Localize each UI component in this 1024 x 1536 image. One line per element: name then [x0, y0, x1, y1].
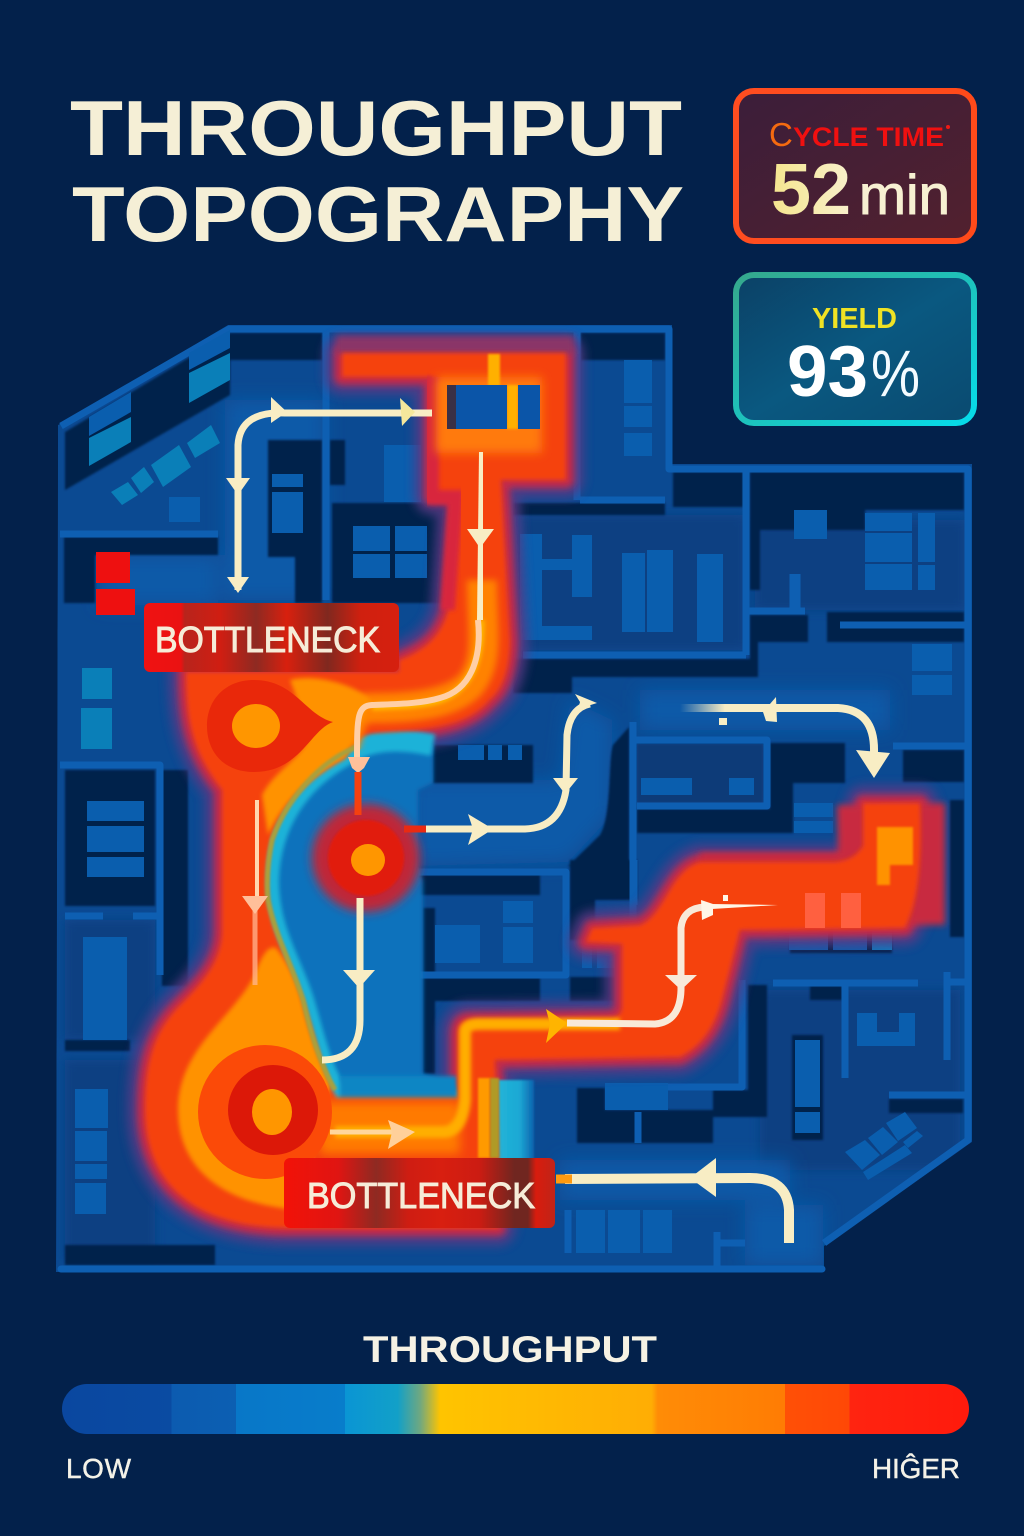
heat zone outer purple halo: [145, 353, 921, 1228]
heat: route glow: [345, 580, 484, 745]
KPI card: cycle time: [736, 91, 974, 241]
equipment blocks: [75, 330, 952, 1253]
heat: left red fringe: [432, 377, 456, 610]
lighter blue rooms: [637, 744, 763, 803]
label: bottleneck upper: [144, 603, 399, 672]
teal blocks: [81, 353, 230, 749]
KPI card: cycle time: 52: [771, 150, 851, 230]
heat: right zone fringe: [700, 803, 945, 925]
heat: top halo block: [336, 336, 574, 354]
KPI card: cycle time: C: [769, 116, 793, 153]
title: [70, 84, 684, 258]
legend low: LOW: [66, 1453, 132, 1484]
arrow: upper right: [680, 697, 890, 778]
heat: right zone orange and pink blocks: [805, 827, 913, 928]
legend: [62, 1329, 969, 1484]
lit corridor zones: [100, 400, 890, 1265]
arrow: down from top station: [348, 452, 494, 815]
arrow: lower corridor: [330, 895, 778, 1149]
heat: edge blend: [267, 746, 360, 1090]
heat zone fill: [145, 353, 921, 1228]
arrow: left channel down: [242, 800, 268, 985]
title: TOPOGRAPHY: [72, 170, 684, 258]
heat: amber lobe lower: [178, 947, 330, 1210]
walls: [60, 329, 968, 1269]
arrow: bottom right: [556, 1158, 789, 1243]
heat: amber lobe upper: [262, 678, 372, 835]
heat: bottom corridor: [320, 1102, 460, 1154]
heat: yellow accents: [488, 354, 518, 429]
dark rooms: [64, 333, 964, 1265]
arrow: top loop: [226, 397, 432, 593]
legend high: HIĜER: [872, 1453, 960, 1484]
red blocks, left: [96, 552, 135, 615]
heat zone inner red halo: [145, 353, 921, 1228]
arrow: centre down: [322, 898, 375, 1060]
KPI card: yield: [736, 275, 974, 423]
KPI card: yield: 93: [787, 332, 868, 412]
equipment in hot zone: [447, 385, 540, 429]
floor base: [56, 325, 972, 1272]
KPI card: yield: YIELD: [812, 303, 897, 335]
hotspot A: [207, 680, 333, 772]
legend colour bar: [62, 1384, 969, 1434]
label: bottleneck lower: [284, 1158, 555, 1228]
legend title: THROUGHPUT: [363, 1329, 657, 1370]
hotspot C: [312, 804, 420, 912]
KPI card: yield: %: [871, 336, 920, 410]
label: bottleneck lower: BOTTLENECK: [307, 1175, 535, 1216]
heat: orange band around equipment: [436, 377, 542, 453]
title: THROUGHPUT: [70, 84, 682, 172]
KPI card: cycle time: min: [859, 163, 950, 226]
teal low-flow basin: [267, 740, 534, 1160]
darker floor zones: [65, 515, 965, 1260]
floor plan map: [56, 325, 972, 1272]
arrow: centre to upper right: [404, 694, 597, 845]
KPI card: cycle time: YCLE TIME: [793, 122, 944, 152]
hotspot B: [198, 1045, 332, 1179]
label: bottleneck upper: BOTTLENECK: [155, 619, 380, 660]
